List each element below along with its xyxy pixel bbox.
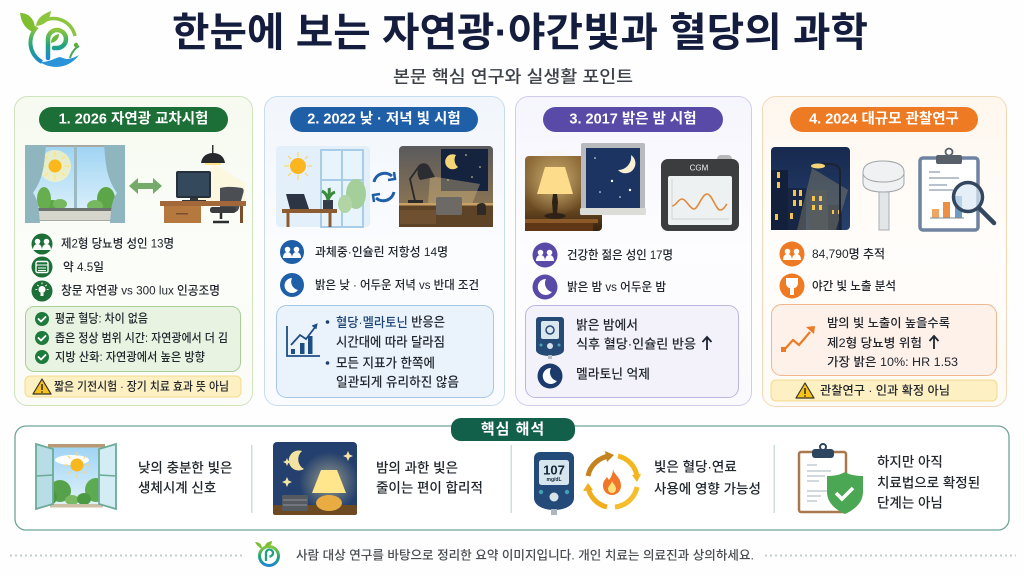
caution note: 관찰연구 · 인과 확정 아님 <box>820 384 950 398</box>
subtitle: 본문 핵심 연구와 실생활 포인트 <box>393 68 633 86</box>
icon: open window <box>36 444 116 509</box>
participants row: 과체중·인슐린 저항성 14명 <box>315 245 448 259</box>
icon: rising trend line <box>781 326 815 352</box>
icon: clipboard with shield <box>799 444 863 514</box>
text: not yet established: 치료법으로 확정된 <box>877 476 980 490</box>
findings box <box>26 306 240 372</box>
findings box <box>526 306 738 398</box>
findings box: 가장 밝은 10%: HR 1.53 <box>827 355 958 369</box>
panel heading <box>290 107 478 132</box>
icon: bedside lamp <box>521 148 602 231</box>
panel heading <box>39 107 228 132</box>
findings box: 지방 산화: 자연광에서 높은 방향 <box>55 350 205 364</box>
icon: flame in energy cycle <box>583 451 641 507</box>
panel heading: 1. 2026 자연광 교차시험 <box>59 110 208 128</box>
panel heading <box>451 418 575 441</box>
icon: night lamp and books <box>273 442 359 515</box>
panel: key interpretation <box>15 418 1009 530</box>
conditions row: 밝은 밤 vs 어두운 밤 <box>567 280 666 294</box>
duration row: 약 4.5일 <box>63 260 104 274</box>
footer logo <box>255 541 278 566</box>
icon: rising chart <box>287 324 320 356</box>
participants row: 건강한 젊은 성인 17명 <box>567 248 673 262</box>
findings box: 식후 혈당·인슐린 반응 <box>576 336 696 352</box>
icon: clipboard with magnifier <box>920 148 994 230</box>
findings box: 밤의 빛 노출이 높을수록 <box>827 316 950 330</box>
exposure row <box>780 274 896 298</box>
panel: 2022 day and evening light trial <box>264 96 504 406</box>
panel: 2024 large observational study <box>762 96 1006 406</box>
icon: glucose meter 107: mg/dL <box>546 477 562 483</box>
icon: glucose meter 107: 107 <box>543 462 565 478</box>
conditions row: 밝은 낮 · 어두운 저녁 vs 반대 조건 <box>315 277 479 292</box>
logo <box>20 11 79 67</box>
text: daylight <box>138 460 232 496</box>
text: night light: 줄이는 편이 합리적 <box>376 480 483 496</box>
panel heading: 핵심 해석 <box>481 421 545 438</box>
icon: up arrow <box>702 337 712 350</box>
exposure row: 야간 빛 노출 분석 <box>812 279 896 293</box>
conditions row <box>280 273 479 297</box>
icon: night city with street lamp <box>771 147 850 230</box>
findings box: 혈당·멜라토닌 반응은 <box>336 314 445 330</box>
icon: sunny window with curtains <box>25 145 125 223</box>
conditions row <box>32 280 220 302</box>
icon: bright day desk <box>276 146 370 227</box>
icon: up arrow <box>930 336 938 349</box>
findings box: 모든 지표가 한쪽에 <box>336 356 435 370</box>
panel heading: 3. 2017 밝은 밤 시험 <box>569 110 697 128</box>
text: night light: 밤의 과한 빛은 <box>376 460 458 476</box>
participants row: 제2형 당뇨병 성인 13명 <box>61 236 174 250</box>
text: not yet established <box>877 454 980 510</box>
icon: swap arrows <box>373 172 395 202</box>
icon: glucose meter <box>536 317 564 359</box>
conditions row: 창문 자연광 vs 300 lux 인공조명 <box>61 284 220 298</box>
caution note <box>25 376 241 397</box>
caution note <box>771 380 997 401</box>
findings box <box>276 306 494 398</box>
findings box: 시간대에 따라 달라짐 <box>336 334 445 350</box>
findings box: 좁은 정상 범위 시간: 자연광에서 더 김 <box>55 331 228 345</box>
panel heading <box>790 107 978 132</box>
icon: desk with monitor, lamp and chair <box>160 145 246 223</box>
participants row <box>32 234 174 254</box>
findings box: 일관되게 유리하진 않음 <box>336 374 459 390</box>
text: not yet established: 하지만 아직 <box>877 454 943 470</box>
participants row: 84,790명 추적 <box>812 247 885 261</box>
panel heading <box>543 107 723 132</box>
findings box: 평균 혈당: 차이 없음 <box>55 312 148 326</box>
participants row <box>532 242 673 268</box>
panel: 2017 bright night trial <box>516 96 752 406</box>
icon: moon <box>538 364 562 388</box>
panel: 2026 natural light crossover trial <box>14 96 252 406</box>
icon: glucose meter 107 <box>534 452 574 515</box>
text: light and fuel: 사용에 영향 가능성 <box>654 482 761 496</box>
icon: dim evening desk <box>399 146 493 227</box>
panel heading: 4. 2024 대규모 관찰연구 <box>809 110 959 128</box>
icon: night window <box>580 143 646 215</box>
icon: light sensor post <box>863 161 904 230</box>
text: not yet established: 단계는 아님 <box>877 496 943 510</box>
participants row <box>780 242 885 266</box>
text: light and fuel: 빛은 혈당·연료 <box>654 458 737 474</box>
conditions row <box>532 274 666 300</box>
findings box <box>772 304 996 376</box>
text: daylight: 생체시계 신호 <box>138 480 216 496</box>
footer note: 사람 대상 연구를 바탕으로 정리한 요약 이미지입니다. 개인 치료는 의료진과 상의하세요. <box>296 548 754 562</box>
panel heading: 2. 2022 낮 · 저녁 빛 시험 <box>307 110 461 128</box>
findings box: 멜라토닌 억제 <box>576 366 650 382</box>
title: 한눈에 보는 자연광·야간빛과 혈당의 과학 <box>172 11 868 55</box>
arrow: compare <box>129 178 162 194</box>
caution note: 짧은 기전시험 · 장기 치료 효과 뜻 아님 <box>54 378 229 394</box>
text: night light <box>376 460 483 496</box>
findings box: 제2형 당뇨병 위험 <box>827 335 922 350</box>
participants row <box>280 240 448 264</box>
icon: continuous glucose monitor <box>661 155 739 231</box>
icon: continuous glucose monitor: CGM <box>690 164 709 172</box>
duration row <box>32 256 104 278</box>
text: light and fuel <box>654 458 761 496</box>
text: daylight: 낮의 충분한 빛은 <box>138 460 232 476</box>
findings box: 밝은 밤에서 <box>576 318 638 332</box>
